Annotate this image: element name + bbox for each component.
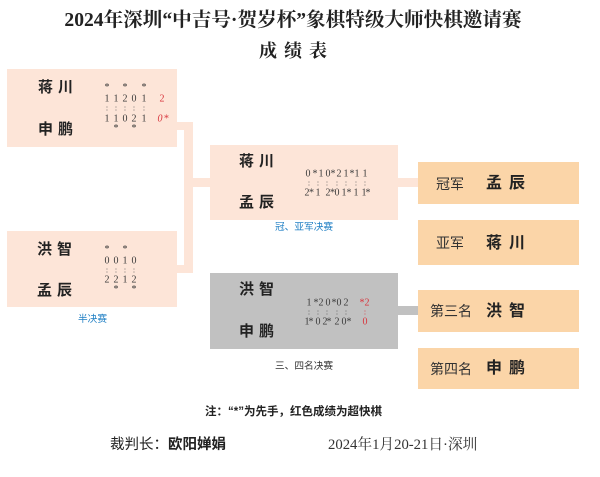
score grid: final: ::::::: [308, 178, 366, 188]
connector: final to champion [398, 178, 418, 187]
caption: third place match: 三、四名决赛 [275, 361, 333, 372]
score grid: final: 2*12*01*11* [304, 188, 370, 198]
result: runner-up [418, 220, 579, 265]
score grid: semifinal 1: ::::: [106, 104, 145, 112]
connector: semifinals to final [177, 122, 210, 273]
score grid: semifinal 1: 11021 [104, 114, 146, 124]
score grid: semifinal 2: 0010 [104, 256, 136, 266]
result: champion [418, 162, 579, 204]
rank: 冠军 [436, 176, 464, 192]
player name: 洪智 [37, 241, 77, 258]
score grid: semifinal 2: ** [114, 284, 136, 295]
score grid: semifinal 2: ** [104, 244, 128, 255]
panel: semifinal 2 [7, 231, 177, 307]
score grid: semifinal 1: 2 [160, 94, 164, 104]
score grid: third place match: 0 [362, 316, 368, 328]
player name: 孟辰 [239, 194, 279, 211]
score grid: final: 0*10*21*11 [306, 168, 368, 180]
player name: 申鹏 [38, 121, 78, 138]
caption: semifinals: 半决赛 [78, 314, 107, 325]
player: 孟辰 [486, 175, 532, 192]
player name: 申鹏 [239, 323, 279, 340]
panel: final [210, 145, 398, 220]
score grid: third place match: ::::: [308, 308, 347, 316]
caption: final: 冠、亚军决赛 [275, 222, 333, 233]
panel: third place match [210, 273, 398, 349]
date and place: 2024年1月20-21日·深圳 [328, 437, 477, 453]
title: 2024年深圳“中吉号·贺岁杯”象棋特级大师快棋邀请赛 [64, 10, 522, 31]
note: 注：“*”为先手，红色成绩为超快棋 [205, 406, 382, 418]
player name: 蒋川 [38, 79, 78, 96]
score grid: semifinal 1: 0* [158, 114, 168, 124]
rank: 第三名 [430, 303, 472, 319]
result: fourth place [418, 348, 579, 389]
player name: 孟辰 [37, 282, 77, 299]
rank: 第四名 [430, 361, 472, 377]
subtitle: 成绩表 [259, 41, 334, 61]
score grid: semifinal 2: 2212 [104, 274, 136, 286]
player: 洪智 [486, 303, 532, 320]
player name: 洪智 [239, 281, 279, 298]
result: third place [418, 290, 579, 332]
player: 申鹏 [486, 360, 532, 377]
score grid: third place match: 1*20*02 [306, 298, 348, 308]
player: 蒋川 [486, 235, 532, 252]
score grid: third place match: *2 [360, 298, 370, 308]
score grid: third place match: : [364, 308, 366, 316]
rank: 亚军 [436, 235, 464, 251]
score grid: third place match: 1*02*20* [304, 316, 352, 328]
connector: third place [398, 306, 418, 315]
player name: 蒋川 [239, 153, 279, 170]
score grid: semifinal 1: ** [114, 123, 136, 134]
score grid: semifinal 2: :::: [106, 266, 135, 274]
score grid: semifinal 1: 11201 [104, 94, 146, 104]
panel: semifinal 1 [7, 69, 177, 147]
score grid: semifinal 1: *** [104, 82, 146, 93]
chief referee: 裁判长：欧阳婵娟 [110, 437, 226, 453]
